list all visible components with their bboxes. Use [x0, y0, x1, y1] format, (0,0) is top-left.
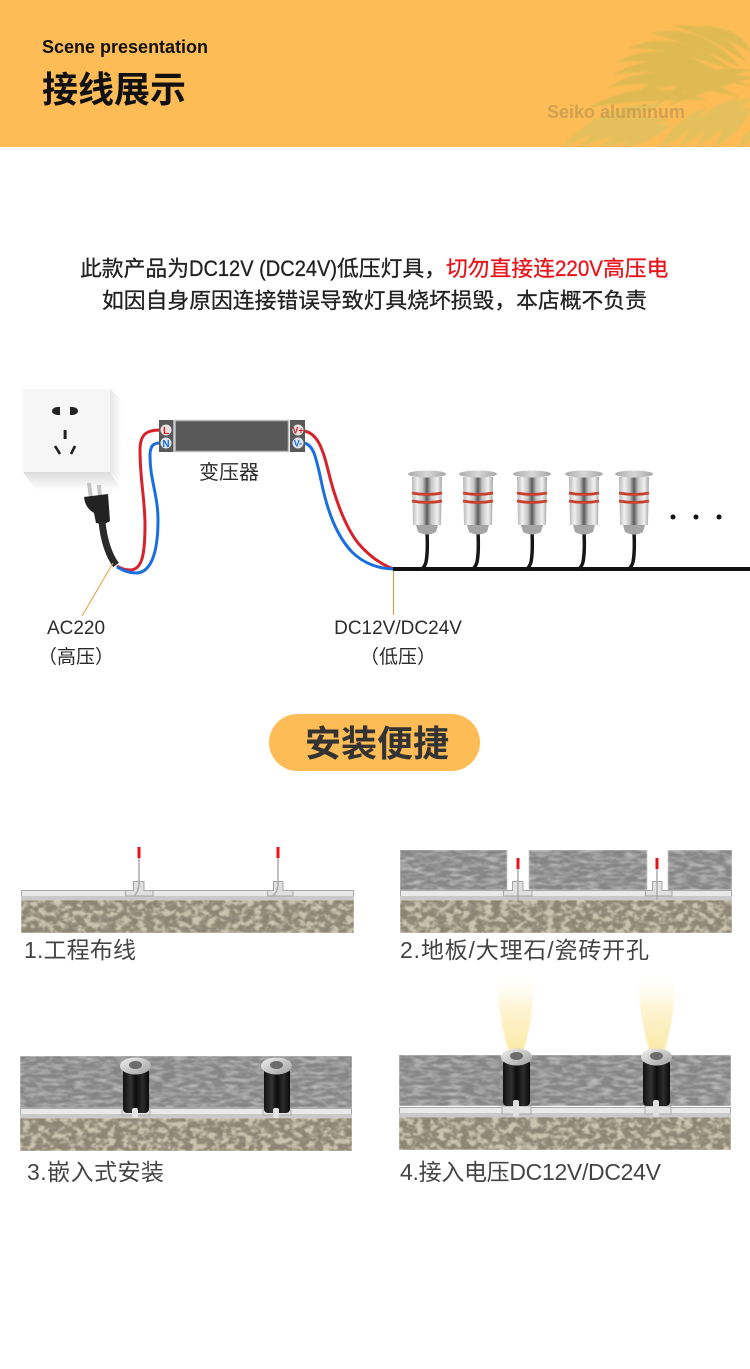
DC label: DC12V/DC24V	[334, 618, 462, 639]
transformer	[159, 420, 305, 452]
AC220 label	[38, 618, 114, 668]
light 1	[501, 1048, 532, 1117]
light 2	[261, 1058, 292, 1118]
panel: step 3 embedded install	[20, 1056, 352, 1185]
warning text: 此款产品为	[80, 256, 189, 281]
caption: 2.地板/大理石/瓷砖开孔	[400, 937, 649, 963]
transformer: L	[163, 426, 169, 437]
junction 2	[646, 858, 672, 900]
panel: step 4 connect voltage	[399, 972, 731, 1185]
light 3	[513, 470, 551, 569]
ground and pipe	[399, 1106, 731, 1150]
junction 2	[268, 847, 293, 896]
ellipsis dots	[670, 514, 722, 520]
AC220 label: AC220	[47, 618, 105, 639]
junction 1	[126, 847, 153, 896]
caption: 1.工程布线	[24, 937, 136, 963]
panel: step 1 wiring	[21, 847, 354, 963]
AC220 label: （高压）	[38, 646, 114, 668]
header subtitle: Scene presentation	[42, 37, 208, 57]
light beams	[498, 972, 675, 1052]
icon: power plug	[84, 483, 116, 565]
caption: 3.嵌入式安装	[27, 1159, 164, 1185]
leader line AC	[82, 563, 113, 616]
stone slabs	[400, 850, 732, 890]
section heading pill	[269, 714, 480, 771]
caption: 4.接入电压DC12V/DC24V	[400, 1159, 662, 1185]
light fixtures row	[408, 470, 653, 569]
DC label	[334, 618, 462, 668]
transformer: V-	[294, 438, 302, 448]
header banner	[0, 0, 750, 147]
light 1	[408, 470, 446, 569]
light 4	[565, 470, 603, 569]
blue wire DC	[304, 443, 394, 569]
stone slab	[399, 1055, 731, 1106]
header title: 接线展示	[42, 69, 186, 110]
leader line DC	[392, 571, 394, 615]
transformer: N	[162, 439, 170, 450]
blue wire AC	[117, 443, 160, 573]
light 2	[641, 1048, 672, 1117]
DC label: （低压）	[360, 646, 436, 668]
junction 1	[504, 858, 532, 900]
transformer: V+	[292, 426, 304, 436]
warning text: 如因自身原因连接错误导致灯具烧坏损毁，本店概不负责	[102, 288, 647, 313]
warning text	[80, 256, 668, 313]
icon: wall socket	[23, 389, 122, 490]
ground and pipe	[400, 890, 732, 933]
transformer label: 变压器	[199, 461, 259, 484]
ground and pipe	[21, 890, 354, 933]
palm leaf decoration	[563, 25, 750, 147]
wiring diagram	[23, 389, 750, 668]
light 5	[615, 470, 653, 569]
ground and pipe	[20, 1108, 352, 1151]
red wire DC	[304, 431, 394, 569]
warning text: DC12V (DC24V)	[189, 256, 337, 281]
main black cable	[393, 567, 750, 571]
watermark: Seiko aluminum	[547, 102, 685, 122]
red wire AC	[117, 430, 160, 570]
stone slab	[20, 1056, 352, 1108]
warning text: 220V	[555, 256, 603, 281]
light 2	[459, 470, 497, 569]
warning text: 低压灯具，	[337, 256, 446, 281]
warning text: 切勿直接连	[446, 256, 555, 281]
section heading pill: 安装便捷	[305, 723, 449, 764]
panel: step 2 drilling	[400, 850, 732, 963]
light 1	[120, 1058, 151, 1118]
warning text: 高压电	[603, 256, 668, 281]
